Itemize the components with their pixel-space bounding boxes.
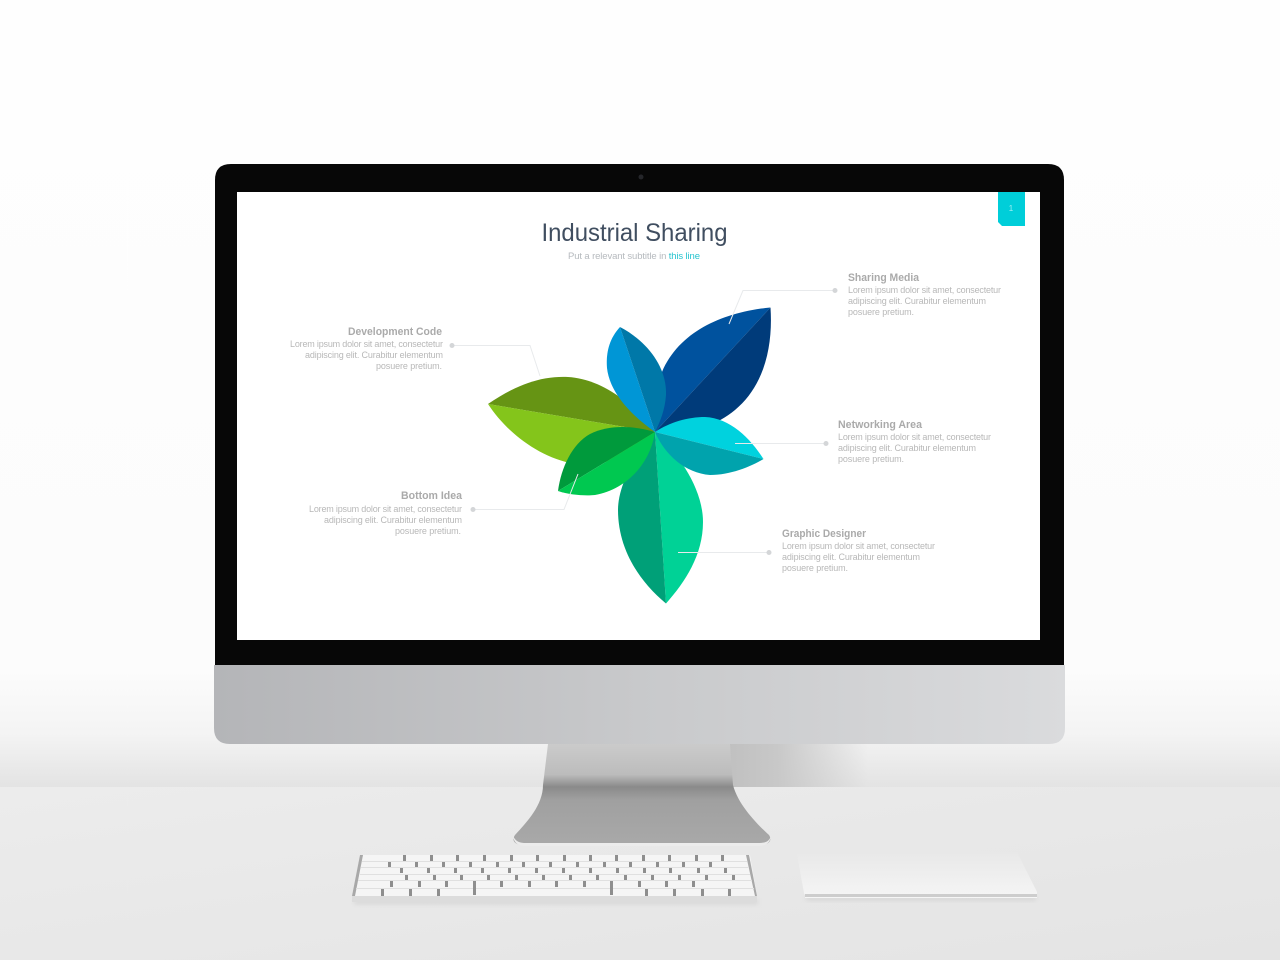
callout: Graphic Designer xyxy=(678,528,935,573)
callout: Sharing Media: Sharing Media xyxy=(848,272,920,284)
callout: Sharing Media xyxy=(729,272,1001,324)
trackpad xyxy=(797,852,1037,900)
callout: Bottom Idea xyxy=(309,474,578,536)
monitor bezel xyxy=(215,164,1064,665)
callout: Networking Area xyxy=(735,419,991,464)
callout: Sharing Media: adipiscing elit. Curabitur elementum xyxy=(848,296,986,306)
petal: cyan (Networking Area) xyxy=(655,417,764,475)
callout: Networking Area: Lorem ipsum dolor sit amet, consectetur xyxy=(838,432,991,442)
callout: Networking Area: adipiscing elit. Curabitur elementum xyxy=(838,443,976,453)
slide screen xyxy=(237,192,1040,640)
callout: Bottom Idea: Lorem ipsum dolor sit amet, consectetur xyxy=(309,504,462,514)
callout: Development Code: Lorem ipsum dolor sit amet, consectetur xyxy=(290,339,443,349)
flower chart xyxy=(488,308,771,604)
petal: bright green (Bottom Idea) xyxy=(558,427,655,495)
callout: Networking Area: Networking Area xyxy=(838,419,923,431)
callout: Development Code: posuere pretium. xyxy=(376,361,442,371)
callout: Graphic Designer: Lorem ipsum dolor sit amet, consectetur xyxy=(782,541,935,551)
petal: olive green (Development Code) xyxy=(488,377,655,465)
callout: Development Code xyxy=(290,326,540,376)
callout: Bottom Idea: Bottom Idea xyxy=(401,490,463,502)
page number tab: 1 xyxy=(1009,204,1014,213)
callout: Bottom Idea: posuere pretium. xyxy=(395,526,461,536)
webcam xyxy=(638,174,644,180)
subtitle: Put a relevant subtitle in this line xyxy=(568,251,700,262)
keys xyxy=(356,855,754,896)
callout: Development Code: Development Code xyxy=(348,326,442,338)
callout: Sharing Media: Lorem ipsum dolor sit amet, consectetur xyxy=(848,285,1001,295)
callout: Sharing Media: posuere pretium. xyxy=(848,307,914,317)
callout: Networking Area: posuere pretium. xyxy=(838,454,904,464)
monitor xyxy=(214,164,1065,744)
callout: Development Code: adipiscing elit. Curabitur elementum xyxy=(305,350,443,360)
monitor chin xyxy=(214,665,1065,744)
background: desk xyxy=(0,787,1280,960)
callout: Graphic Designer: posuere pretium. xyxy=(782,563,848,573)
keyboard xyxy=(352,855,758,904)
petal: dark blue (Sharing Media) xyxy=(653,308,771,433)
shadow behind stand xyxy=(728,744,868,787)
title: Industrial Sharing xyxy=(542,219,728,247)
callout: Graphic Designer: Graphic Designer xyxy=(782,528,867,540)
petal: light blue xyxy=(607,327,666,432)
callout: Graphic Designer: adipiscing elit. Curabitur elementum xyxy=(782,552,920,562)
callout: Bottom Idea: adipiscing elit. Curabitur elementum xyxy=(324,515,462,525)
petal: teal green (Graphic Designer) xyxy=(618,432,703,604)
monitor stand xyxy=(513,744,771,846)
page number tab xyxy=(998,192,1025,226)
